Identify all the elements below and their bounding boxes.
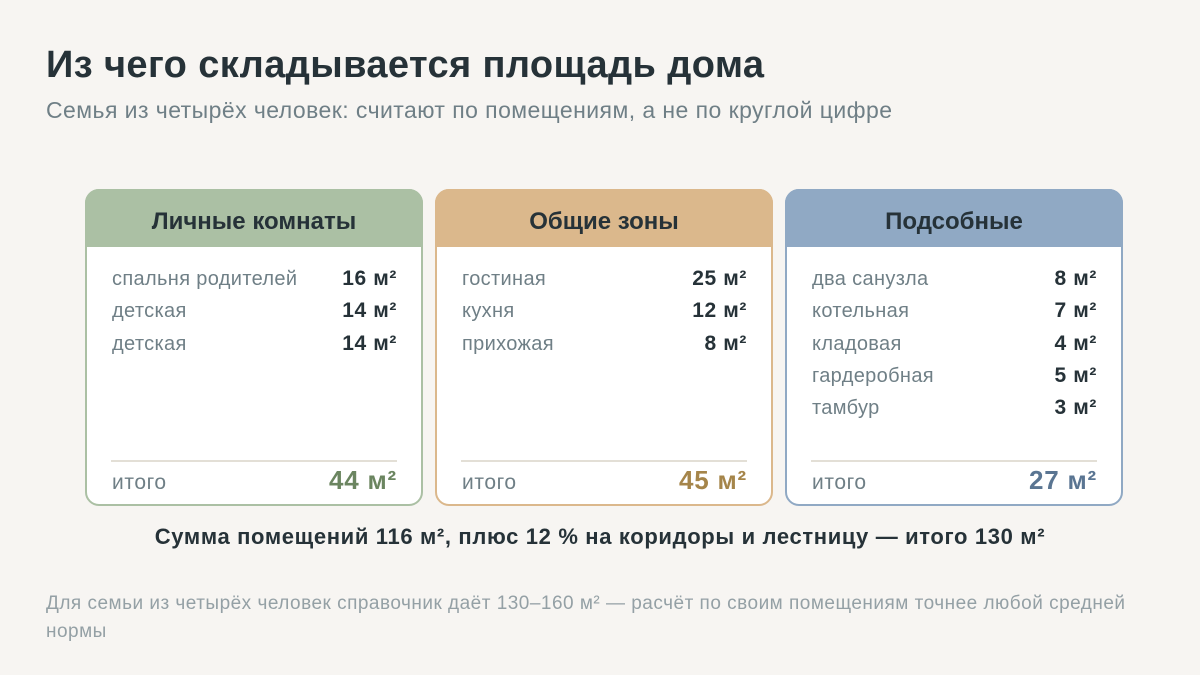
row: child room 1: 14 м² [342, 299, 397, 322]
row: bathrooms: 8 м² [1055, 267, 1097, 290]
panel heading: personal rooms [85, 189, 423, 247]
row: living room: 25 м² [692, 267, 747, 290]
panel heading: utility rooms [785, 189, 1123, 247]
row: boiler room: 7 м² [1055, 299, 1097, 322]
row: child room 2: 14 м² [342, 332, 397, 355]
row: wardrobe: 5 м² [1055, 364, 1097, 387]
footnote: Для семьи из четырёх человек справочник даёт 130–160 м² — расчёт по своим помещениям точнее любой средней [46, 593, 1126, 614]
row: kitchen: кухня [462, 300, 515, 322]
row: child room 2: детская [112, 333, 187, 355]
row: bathrooms: два санузла [812, 268, 929, 290]
panel: common areas [435, 189, 773, 506]
subtitle: Семья из четырёх человек: считают по помещениям, а не по круглой цифре [46, 97, 893, 123]
row: hallway: 8 м² [705, 332, 747, 355]
footnote [46, 593, 1126, 642]
panel heading: personal rooms: Личные комнаты [152, 208, 356, 235]
total: common areas: 45 м² [679, 465, 747, 495]
row: living room: гостиная [462, 268, 546, 290]
row: boiler room: котельная [812, 300, 909, 322]
row: child room 1: детская [112, 300, 187, 322]
total: utility rooms [812, 465, 1097, 495]
row: vestibule [812, 396, 1097, 419]
divider [811, 460, 1097, 462]
panel heading: common areas: Общие зоны [529, 208, 679, 235]
title: Из чего складывается площадь дома [46, 44, 764, 86]
total: personal rooms: 44 м² [329, 465, 397, 495]
row: storage: кладовая [812, 333, 902, 355]
total: utility rooms: итого [812, 471, 867, 494]
row: living room [462, 267, 747, 290]
row: storage [812, 332, 1097, 355]
row: hallway: прихожая [462, 333, 554, 355]
total: personal rooms [112, 465, 397, 495]
row: child room 2 [112, 332, 397, 355]
row: vestibule: 3 м² [1055, 396, 1097, 419]
divider [461, 460, 747, 462]
row: wardrobe: гардеробная [812, 365, 934, 387]
summary line: Сумма помещений 116 м², плюс 12 % на коридоры и лестницу — итого 130 м² [155, 524, 1045, 549]
row: child room 1 [112, 299, 397, 322]
panel: personal rooms [85, 189, 423, 506]
row: kitchen [462, 299, 747, 322]
row: parents bedroom [112, 267, 397, 290]
row: boiler room [812, 299, 1097, 322]
panel heading: common areas [435, 189, 773, 247]
panel: utility rooms [785, 189, 1123, 506]
row: storage: 4 м² [1055, 332, 1097, 355]
row: wardrobe [812, 364, 1097, 387]
row: kitchen: 12 м² [692, 299, 747, 322]
total: utility rooms: 27 м² [1029, 465, 1097, 495]
total: personal rooms: итого [112, 471, 167, 494]
row: parents bedroom: спальня родителей [112, 268, 297, 290]
divider [111, 460, 397, 462]
panel heading: utility rooms: Подсобные [885, 208, 1023, 235]
row: bathrooms [812, 267, 1097, 290]
total: common areas [462, 465, 747, 495]
total: common areas: итого [462, 471, 517, 494]
row: vestibule: тамбур [812, 397, 880, 419]
row: parents bedroom: 16 м² [342, 267, 397, 290]
footnote: нормы [46, 621, 107, 642]
row: hallway [462, 332, 747, 355]
